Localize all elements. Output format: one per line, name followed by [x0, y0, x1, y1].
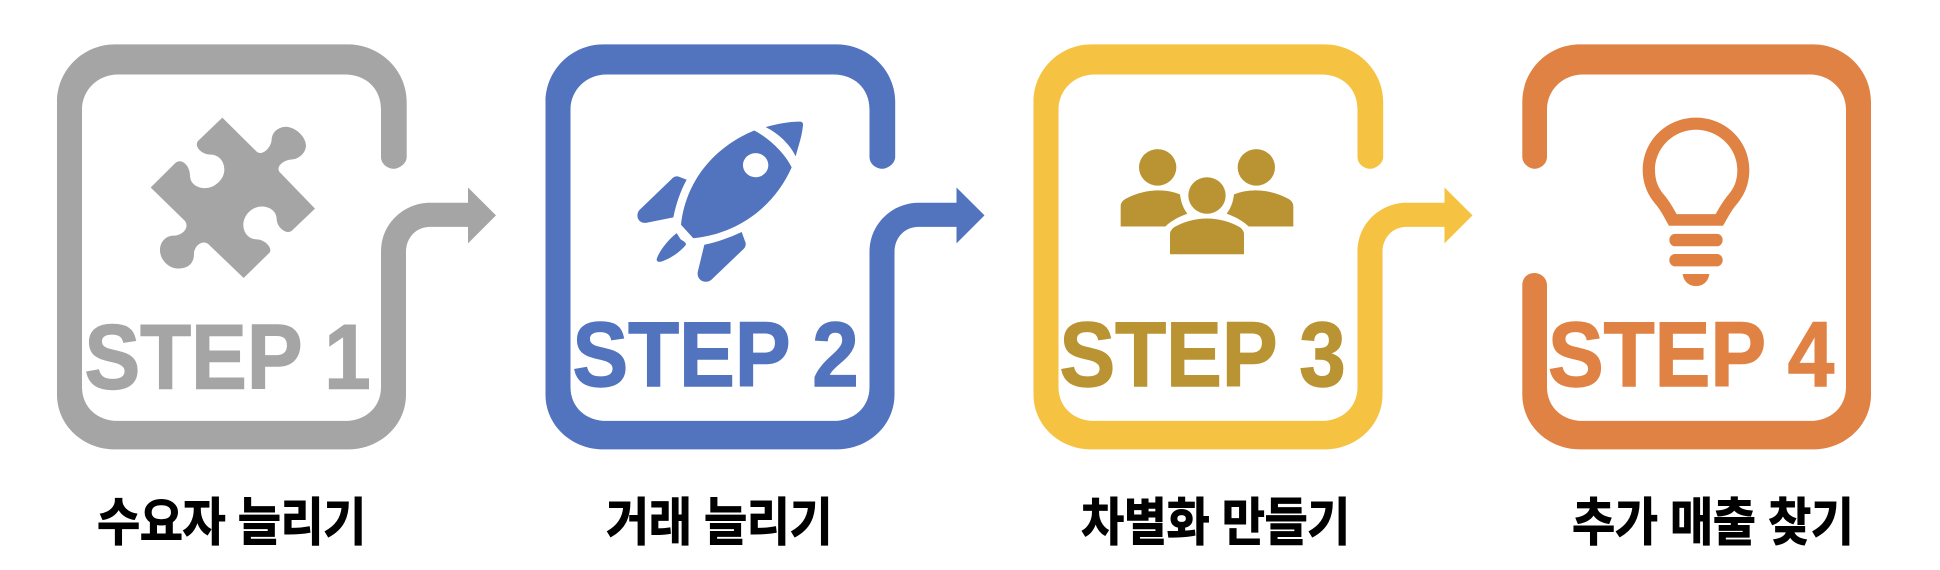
step 4 label: 추가 매출 찾기: [1572, 494, 1853, 552]
step 3 outline with arrow: [1034, 44, 1472, 449]
step 1 outline with arrow: [57, 44, 496, 449]
icon: group of people: [1121, 149, 1293, 254]
step 2 outline with arrow: [546, 44, 984, 449]
step 1 heading: STEP 1: [84, 306, 371, 408]
step 3 heading: STEP 3: [1060, 304, 1346, 406]
step 4 outline: [1522, 44, 1871, 449]
icon: puzzle piece: [151, 118, 315, 278]
step 4 heading: STEP 4: [1548, 304, 1834, 406]
step 3 label: 차별화 만들기: [1081, 494, 1350, 552]
step 1 label: 수요자 늘리기: [97, 494, 366, 552]
step 2 heading: STEP 2: [572, 304, 859, 406]
panel: step 3: [1034, 44, 1472, 552]
panel: step 4: [1522, 44, 1871, 552]
icon: rocket: [637, 122, 803, 282]
panel: step 1: [57, 44, 496, 552]
icon: light bulb: [1643, 118, 1749, 286]
panel: step 2: [546, 44, 984, 552]
step 2 label: 거래 늘리기: [606, 494, 832, 552]
